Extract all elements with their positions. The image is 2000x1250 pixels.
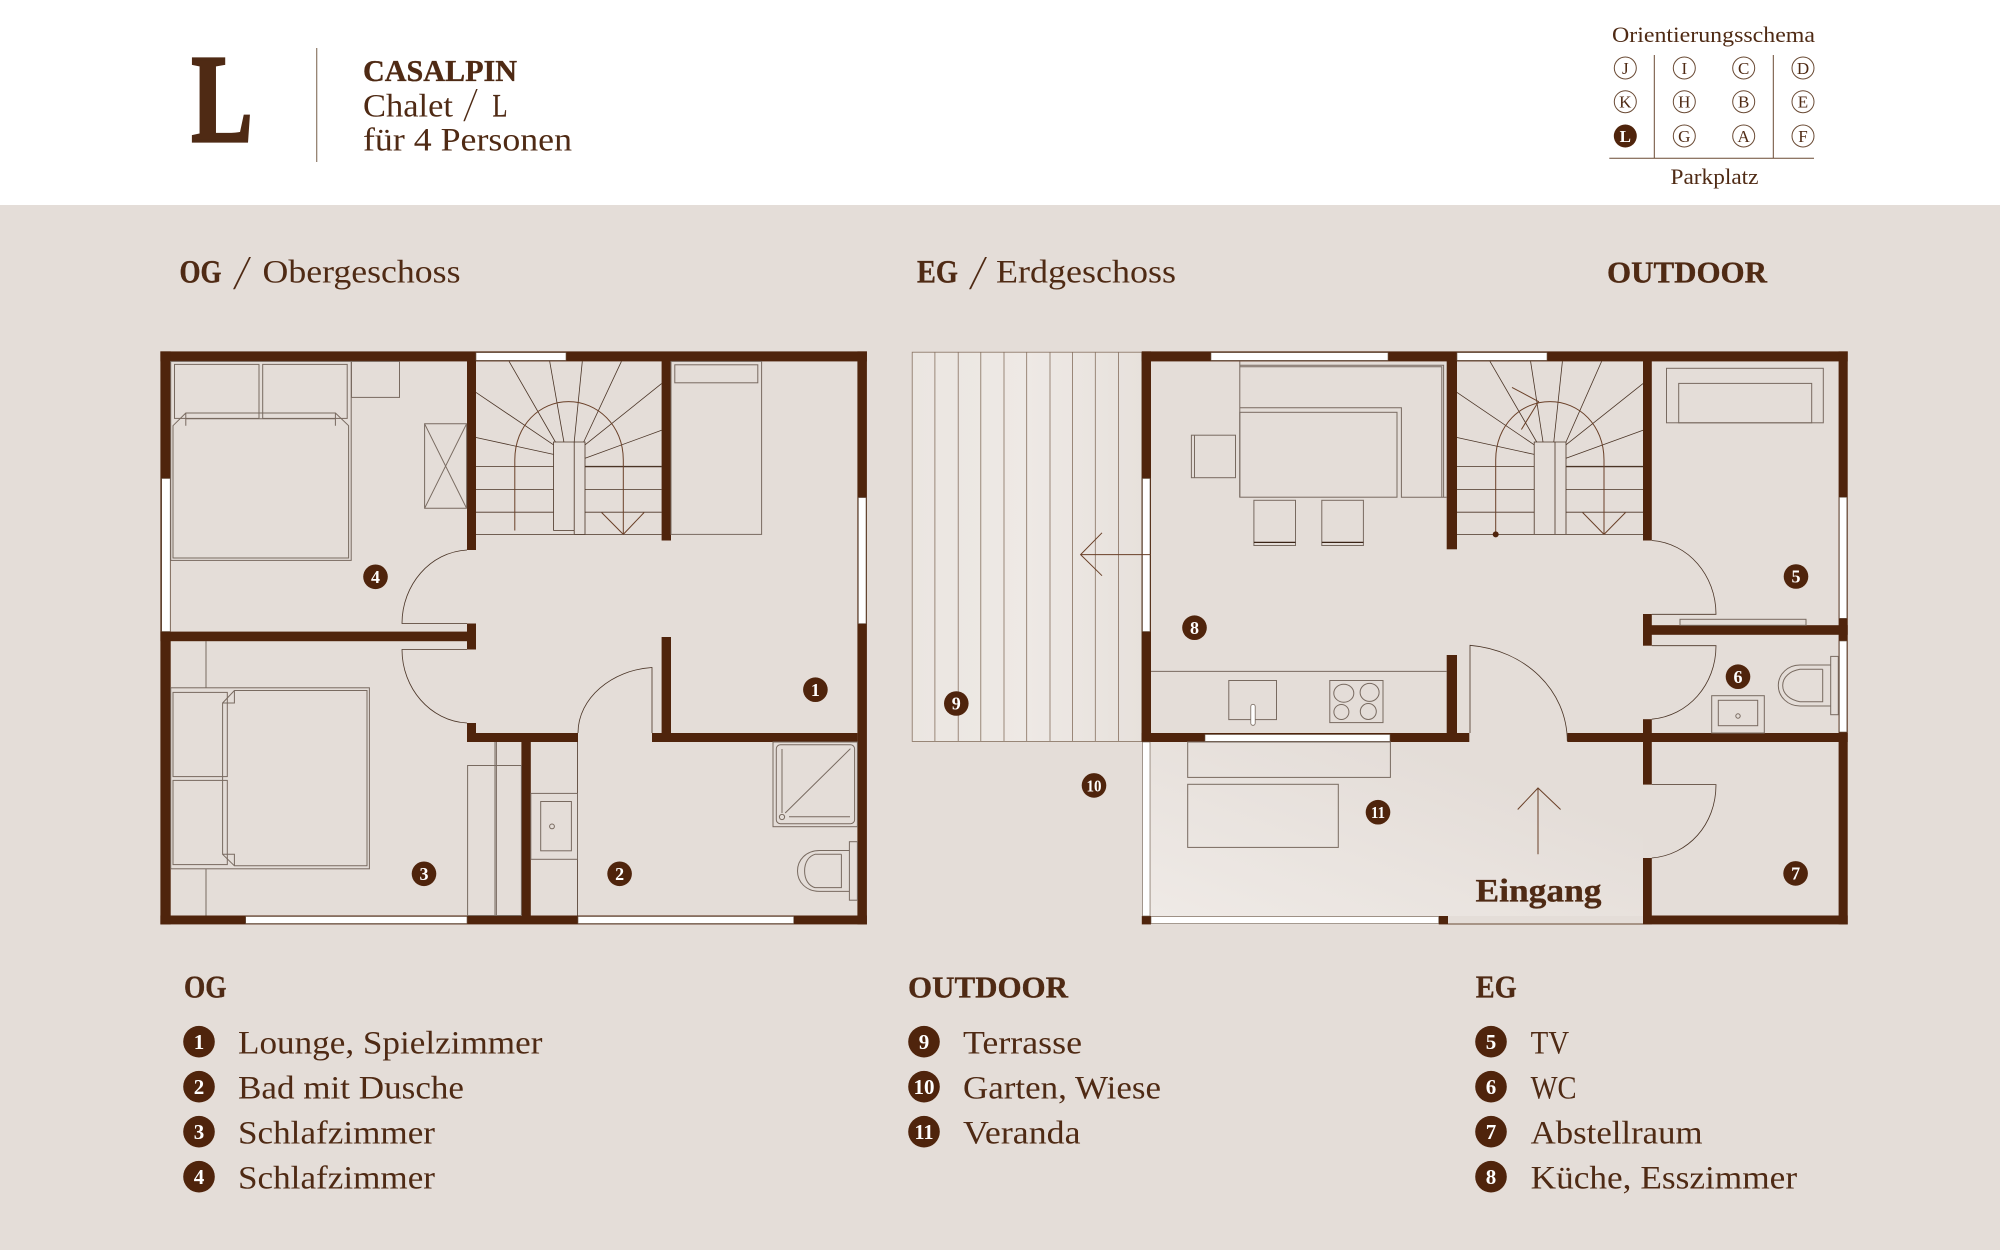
- room number badges on plans: 10: [1086, 776, 1102, 795]
- title block: [363, 53, 572, 159]
- legend: OUTDOOR: OUTDOOR: [908, 970, 1069, 1005]
- legend: EG: 8: [1486, 1165, 1496, 1189]
- title block: Chalet: [363, 89, 453, 125]
- legend: OUTDOOR: Garten, Wiese: [963, 1070, 1161, 1106]
- legend: OG: Schlafzimmer: [238, 1160, 435, 1196]
- title block: L: [492, 89, 508, 125]
- legend: OUTDOOR: Veranda: [963, 1115, 1081, 1151]
- heading: EG Erdgeschoss: /: [968, 244, 988, 300]
- room number badges on plans: 5: [1792, 567, 1800, 587]
- legend: EG: Küche, Esszimmer: [1531, 1160, 1797, 1196]
- heading: OG Obergeschoss: /: [232, 244, 252, 300]
- legend: OG: [183, 969, 542, 1196]
- room number badges on plans: 7: [1791, 864, 1800, 884]
- legend: OUTDOOR: 10: [914, 1075, 934, 1099]
- legend: OUTDOOR: 11: [914, 1120, 934, 1144]
- legend: OG: 4: [194, 1165, 205, 1189]
- orientation scheme: B: [1738, 92, 1749, 112]
- orientation scheme: K: [1619, 92, 1632, 112]
- room number badges on plans: 8: [1190, 618, 1199, 638]
- doors upper floor: [402, 550, 652, 916]
- room number badges on plans: [363, 564, 1808, 886]
- kitchen counter: [1151, 671, 1447, 725]
- heading: EG Erdgeschoss: Erdgeschoss: [996, 254, 1176, 290]
- room number badges on plans: 9: [952, 694, 961, 714]
- heading: OG Obergeschoss: Obergeschoss: [262, 254, 460, 290]
- veranda floor: [1151, 742, 1643, 916]
- orientation scheme: Parkplatz: [1670, 164, 1759, 189]
- orientation scheme: A: [1738, 127, 1751, 146]
- legend: EG: EG: [1476, 969, 1517, 1005]
- legend: EG: Abstellraum: [1531, 1115, 1703, 1151]
- terrace arrow: [1081, 533, 1151, 576]
- room number badges on plans: 1: [811, 680, 820, 700]
- legend: OG: Schlafzimmer: [238, 1115, 435, 1151]
- staircase ground floor: [1457, 361, 1643, 537]
- bedroom 4 furniture: [171, 361, 467, 560]
- legend: OUTDOOR: [908, 970, 1161, 1151]
- legend: EG: TV: [1531, 1025, 1569, 1061]
- title block: /: [462, 76, 479, 132]
- legend: OUTDOOR: Terrasse: [963, 1025, 1082, 1061]
- doors ground floor: [1470, 540, 1716, 858]
- legend: OG: 3: [194, 1120, 204, 1144]
- windows ground floor: [1142, 353, 1847, 924]
- orientation scheme: F: [1798, 127, 1808, 146]
- orientation scheme: G: [1678, 127, 1690, 146]
- title block: für 4 Personen: [363, 123, 572, 159]
- room number badges on plans: 2: [615, 864, 624, 884]
- walls ground floor: [1142, 351, 1848, 924]
- lounge bed: [671, 361, 762, 534]
- WC fixtures: [1712, 656, 1838, 733]
- floor plan: ground floor and outdoor: [912, 351, 1848, 924]
- bedroom 3 furniture: [171, 641, 521, 916]
- floor plan: upper floor: [160, 351, 867, 924]
- room number badges on plans: 3: [420, 864, 428, 884]
- room number badges on plans: 4: [371, 567, 380, 587]
- header divider: [316, 48, 318, 162]
- legend: EG: 7: [1486, 1120, 1496, 1144]
- heading: OG Obergeschoss: OG: [180, 254, 222, 290]
- legend: EG: 6: [1486, 1075, 1496, 1099]
- entrance arrow: [1518, 788, 1561, 854]
- bathroom fixtures: [531, 742, 857, 900]
- heading: EG Erdgeschoss: [917, 244, 1176, 300]
- legend: OG: 1: [194, 1030, 204, 1054]
- heading: OUTDOOR: OUTDOOR: [1607, 254, 1768, 289]
- heading: OG Obergeschoss: [180, 244, 460, 300]
- walls upper floor: [160, 351, 867, 924]
- orientation scheme: I: [1681, 59, 1687, 78]
- terrace deck: [912, 352, 1142, 741]
- orientation scheme: J: [1622, 59, 1629, 78]
- orientation scheme: Orientierungsschema: [1612, 22, 1815, 47]
- legend: EG: WC: [1531, 1070, 1577, 1106]
- windows upper floor: [162, 353, 866, 924]
- orientation scheme: L: [1620, 127, 1631, 146]
- staircase upper floor: [476, 361, 662, 534]
- title block: CASALPIN: [363, 53, 517, 88]
- legend: OG: OG: [184, 969, 227, 1005]
- header band: [0, 0, 2000, 205]
- orientation scheme: E: [1798, 92, 1808, 112]
- heading: EG Erdgeschoss: EG: [917, 254, 958, 290]
- room number badges on plans: 11: [1371, 803, 1385, 822]
- legend: OG: 2: [194, 1075, 204, 1099]
- room number badges on plans: 6: [1734, 667, 1742, 687]
- orientation scheme: H: [1678, 92, 1690, 112]
- TV unit: [1666, 368, 1823, 625]
- orientation scheme: [1609, 22, 1815, 189]
- veranda furniture: [1188, 742, 1390, 847]
- legend: OG: Bad mit Dusche: [238, 1070, 464, 1106]
- legend: OUTDOOR: 9: [919, 1030, 929, 1054]
- big letter L: L: [192, 31, 252, 169]
- legend: OG: Lounge, Spielzimmer: [238, 1025, 542, 1061]
- orientation scheme: D: [1797, 59, 1809, 78]
- entrance label: Eingang: [1476, 873, 1602, 909]
- orientation scheme: C: [1738, 59, 1749, 78]
- dining furniture: [1191, 361, 1447, 546]
- legend: EG: 5: [1486, 1030, 1496, 1054]
- legend: EG: [1475, 969, 1797, 1196]
